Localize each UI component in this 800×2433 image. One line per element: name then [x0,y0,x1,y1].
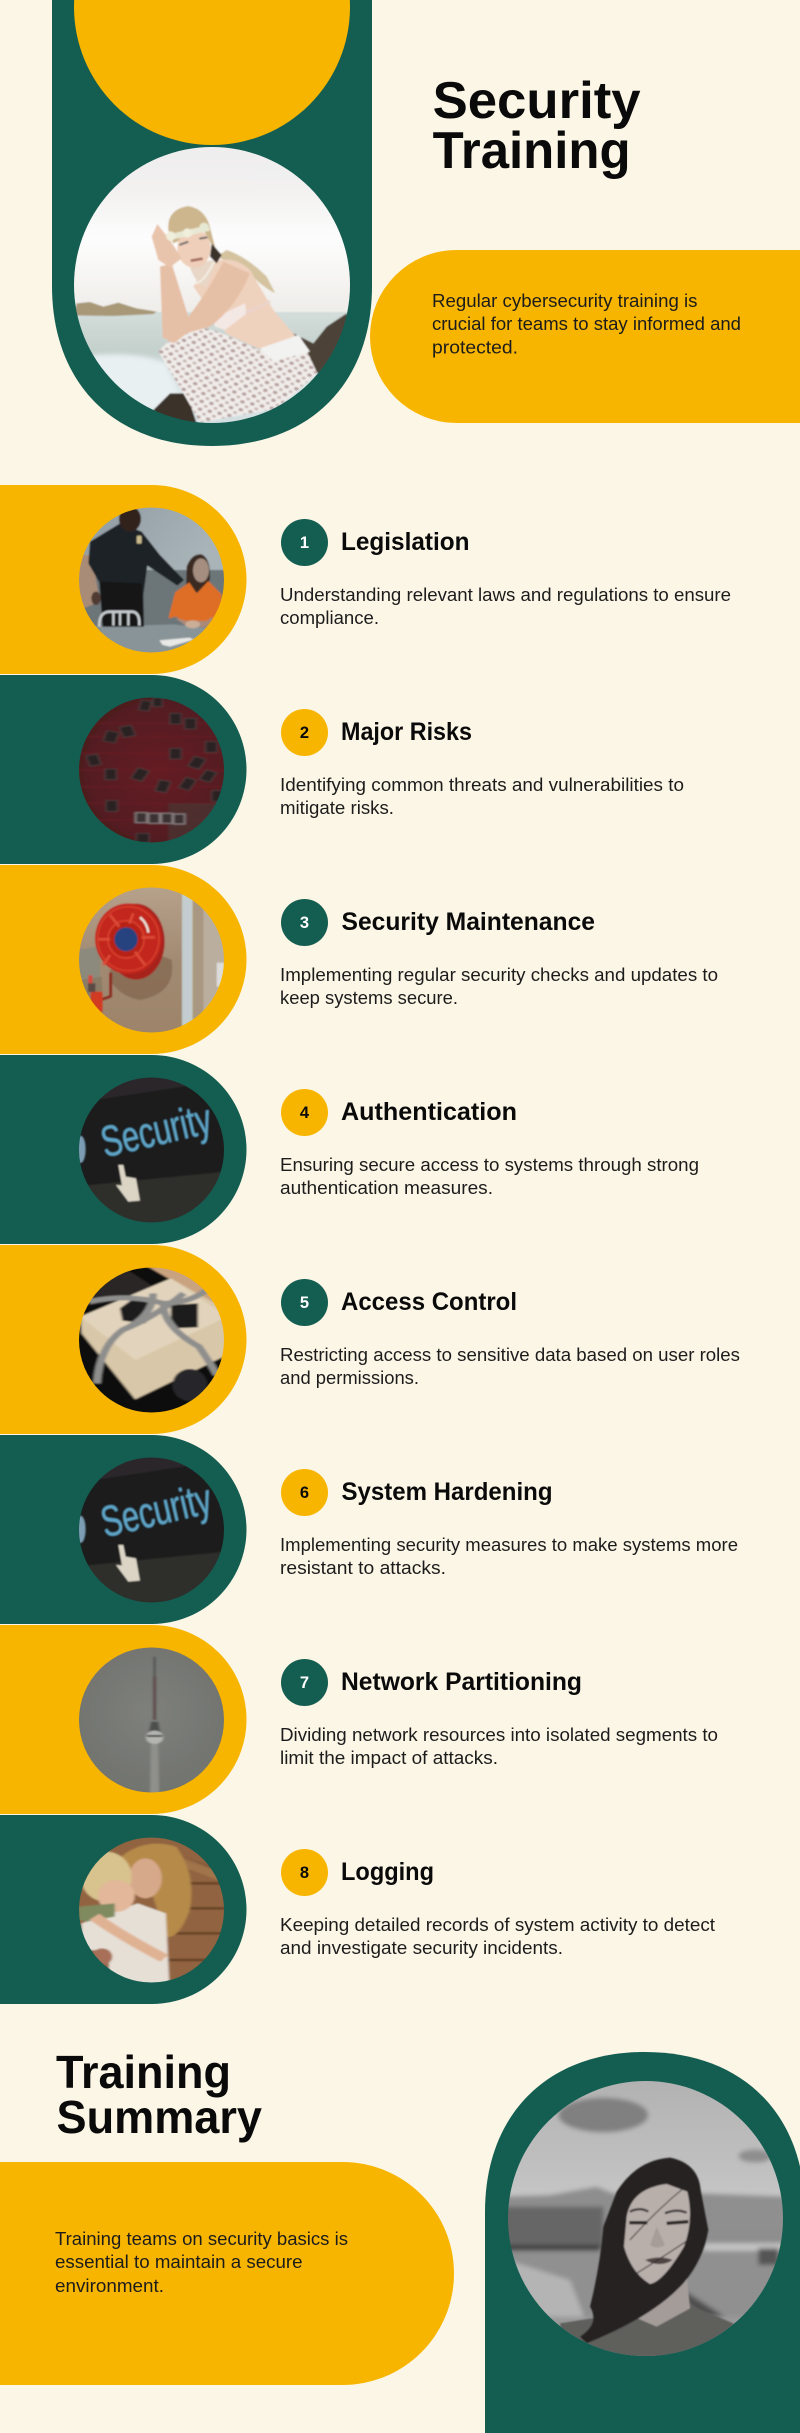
description [280,1155,699,1198]
description: Ensuring secure access to systems through strong [280,1155,699,1175]
panel: step 4 Authentication [0,1055,699,1244]
description [280,1915,715,1958]
description: and permissions. [280,1368,419,1388]
panel: step 3 Security Maintenance [0,865,718,1054]
description [280,585,731,628]
panel: step 5 Access Control [0,1245,740,1434]
title: Security Training [433,72,641,180]
heading: Training Summary: Summary [56,2091,262,2143]
number badge: 7 [300,1674,309,1692]
description [280,1345,740,1388]
panel: step 6 System Hardening [0,1435,738,1624]
intro callout [370,250,800,423]
heading: Major Risks [341,718,472,746]
pill background [0,675,246,864]
number badge [281,1849,328,1896]
photo: fire hose reel [79,888,224,1032]
photo: security screen with cursor: Security [96,1475,216,1547]
number badge [281,1659,328,1706]
hero panel: green capsule with yellow circle and photo [52,0,372,446]
description [280,1535,738,1578]
title: Security Training: Security [433,72,641,130]
photo: security screen with cursor [79,1078,224,1222]
pill background [0,1815,246,2004]
panel: step 7 Network Partitioning [0,1625,718,1814]
heading: Logging [341,1858,434,1886]
pill background [0,1055,246,1244]
green arch [485,2052,800,2433]
description: and investigate security incidents. [280,1938,563,1958]
description: Identifying common threats and vulnerabilities to [280,775,684,795]
photo: letter tiles on red wood [79,698,224,842]
number badge [281,1089,328,1136]
panel: step 1 Legislation [0,485,731,674]
description: Implementing regular security checks and updates to [280,965,718,985]
number badge: 6 [300,1484,309,1502]
intro callout: Regular cybersecurity training is [432,291,698,311]
number badge [281,1469,328,1516]
number badge: 4 [300,1104,310,1122]
photo: woman on the beach [74,147,350,423]
summary callout [0,2162,454,2385]
description: Implementing security measures to make systems more [280,1535,738,1555]
description [280,1725,718,1768]
photo: black and white portrait [508,2081,783,2356]
title: Security Training: Training [433,122,631,180]
description: resistant to attacks. [280,1558,446,1578]
heading: Legislation [341,528,470,556]
number badge [281,519,328,566]
description: authentication measures. [280,1178,493,1198]
green capsule [52,0,372,446]
description: Restricting access to sensitive data based on user roles [280,1345,740,1365]
description: Keeping detailed records of system activity to detect [280,1915,715,1935]
photo: chained book and phones [79,1268,224,1412]
yellow circle [74,0,350,145]
pill background [0,1625,246,1814]
photo: security screen with cursor: Security [96,1095,216,1167]
summary callout: Training teams on security basics is [55,2229,348,2249]
panel: step 8 Logging [0,1815,715,2004]
summary callout: environment. [55,2276,164,2296]
pill background [0,1245,246,1434]
summary callout: essential to maintain a secure [55,2252,302,2272]
description: compliance. [280,608,379,628]
heading: System Hardening [342,1478,552,1506]
photo: woman hugging child [79,1838,224,1982]
number badge: 2 [300,724,309,742]
number badge: 3 [300,914,309,932]
number badge [281,709,328,756]
heading: Access Control [341,1288,517,1316]
number badge: 5 [300,1294,309,1312]
description: Understanding relevant laws and regulations to ensure [280,585,731,605]
heading: Authentication [341,1098,517,1126]
panel: step 2 Major Risks [0,675,684,864]
photo: communications tower [79,1648,224,1792]
description: limit the impact of attacks. [280,1748,498,1768]
number badge [281,1279,328,1326]
closing panel: green arch with portrait [485,2052,800,2433]
heading: Training Summary: Training [56,2046,231,2098]
pill background [0,865,246,1054]
heading: Training Summary [56,2046,262,2143]
number badge [281,899,328,946]
photo: security screen with cursor [79,1458,224,1602]
number badge: 1 [300,534,309,552]
description [280,965,718,1008]
description: Dividing network resources into isolated segments to [280,1725,718,1745]
pill background [0,485,246,674]
description [280,775,684,818]
heading: Network Partitioning [341,1668,582,1696]
description: mitigate risks. [280,798,394,818]
photo: officer and prisoner [79,508,224,652]
intro callout: crucial for teams to stay informed and [432,314,741,334]
pill background [0,1435,246,1624]
number badge: 8 [300,1864,309,1882]
intro callout: protected. [432,338,518,358]
heading: Security Maintenance [342,908,595,936]
description: keep systems secure. [280,988,458,1008]
